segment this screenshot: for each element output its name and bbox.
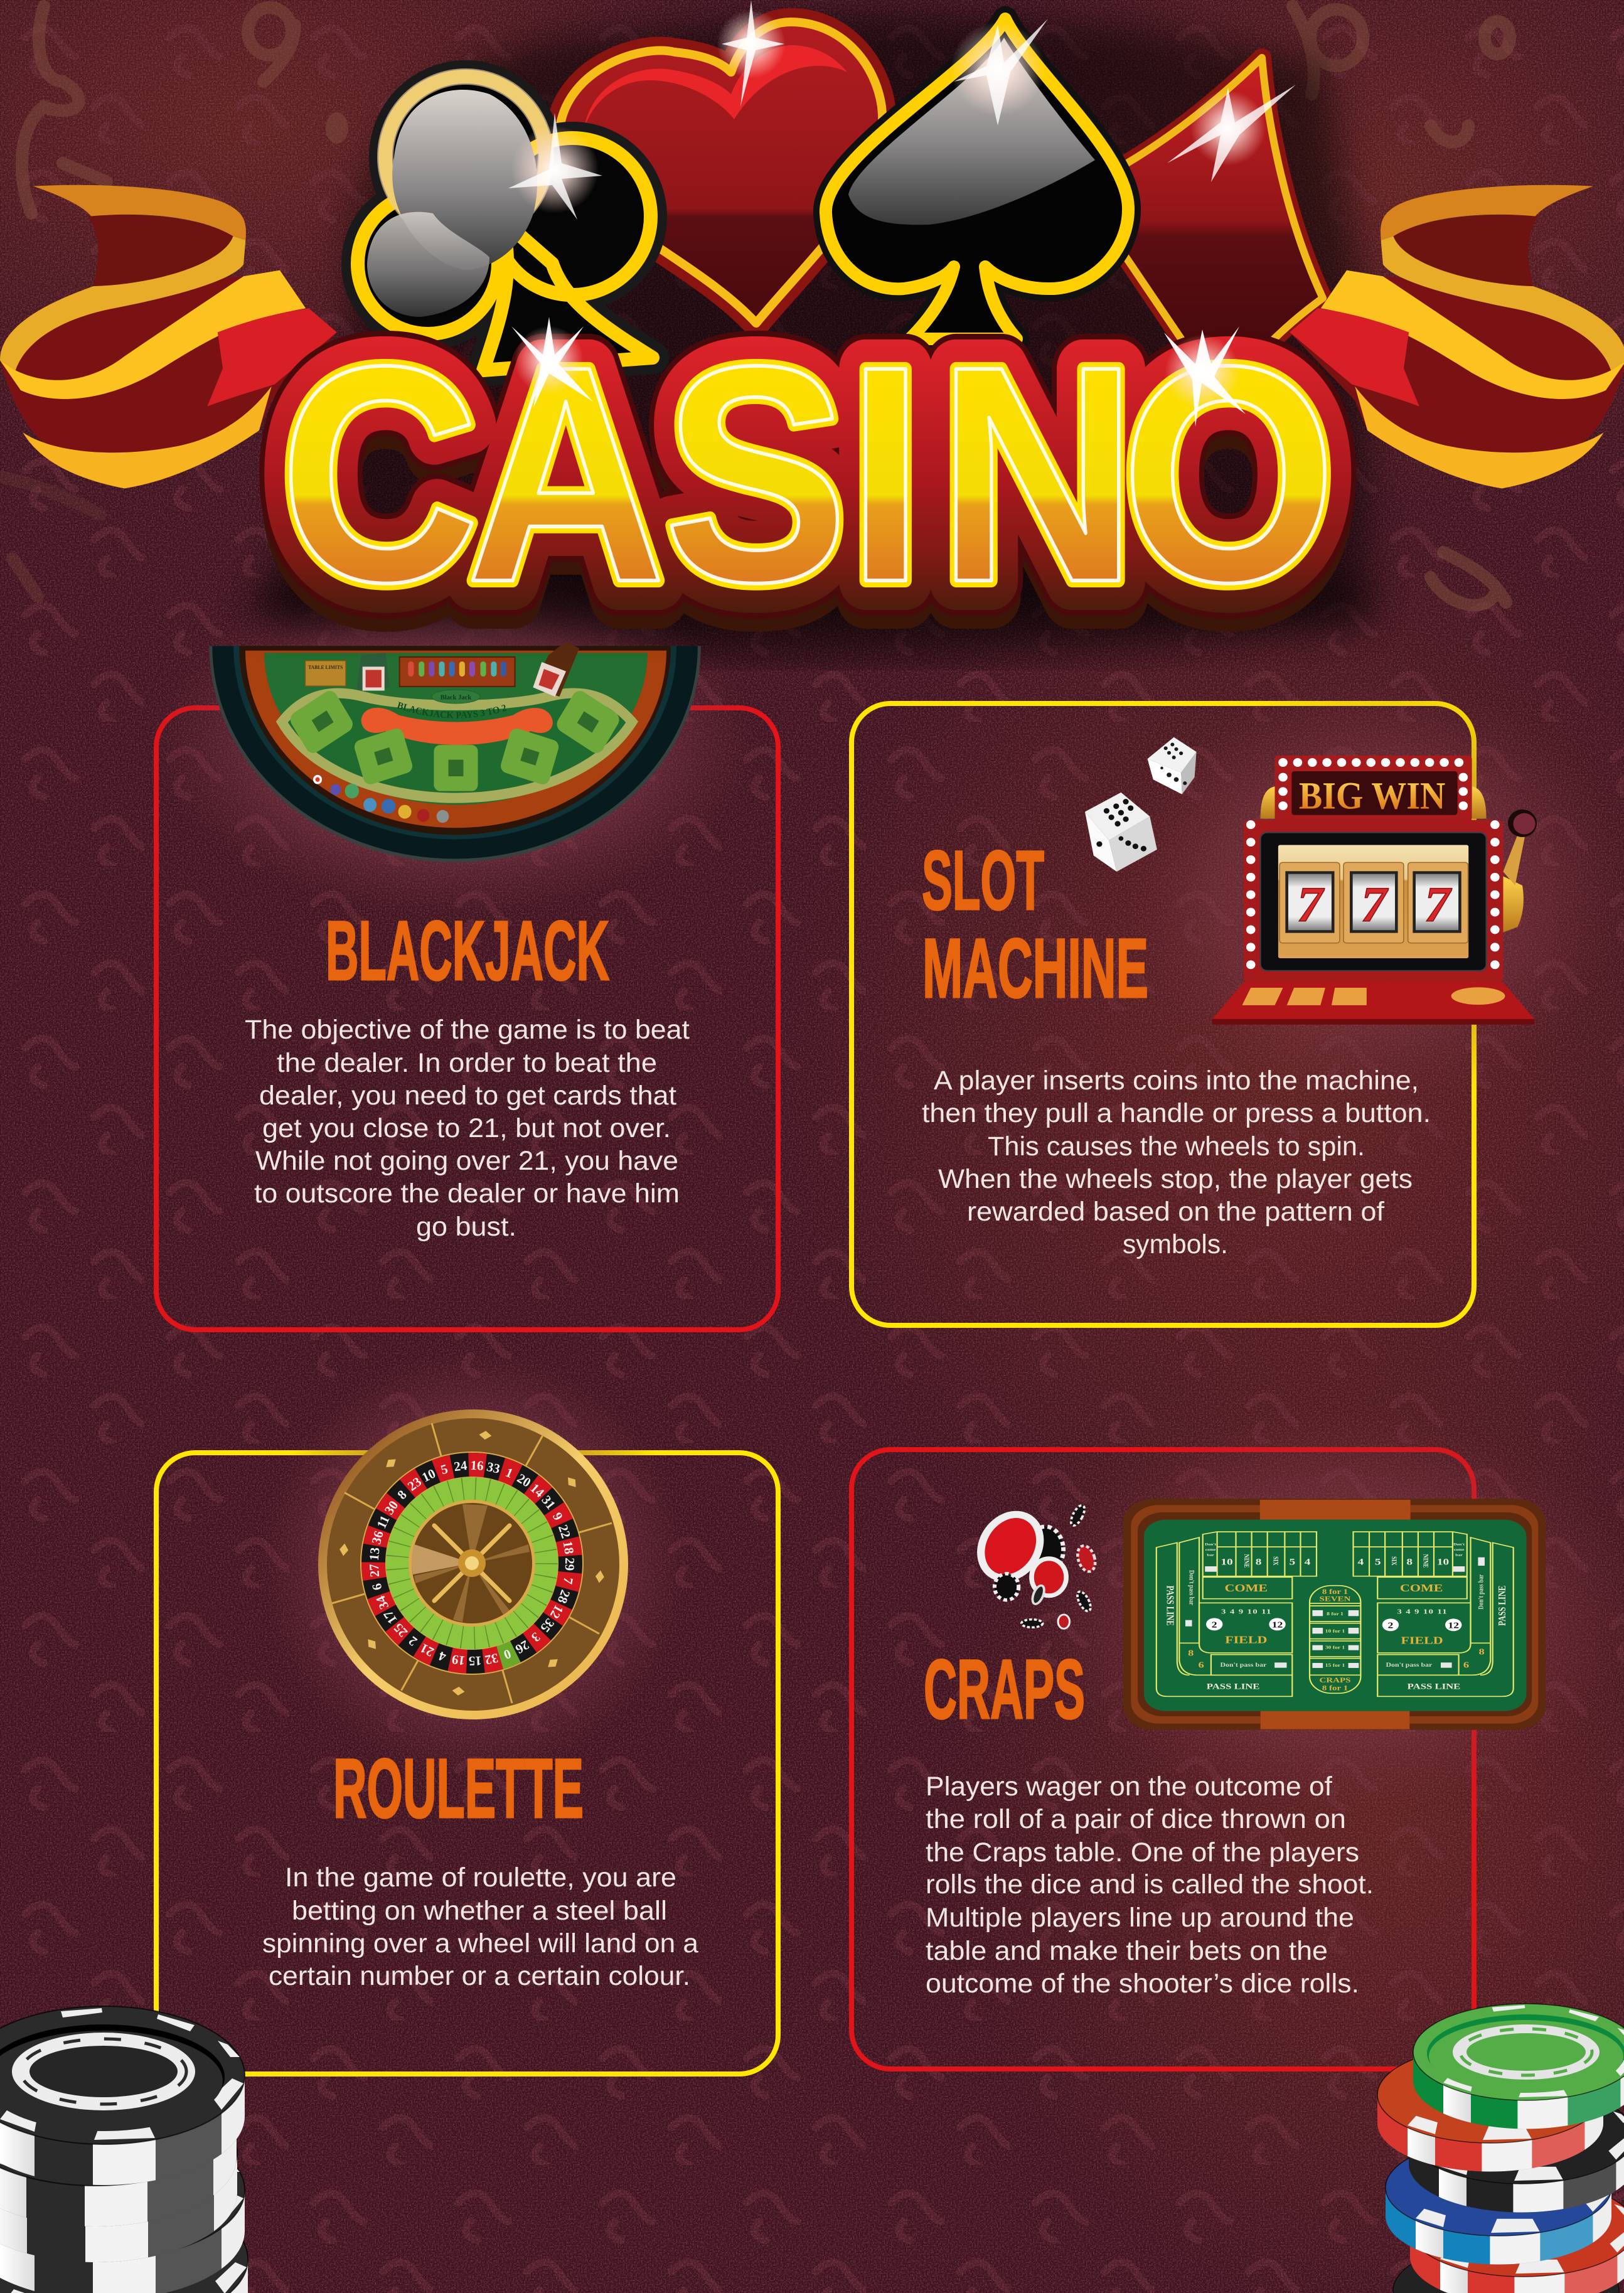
title: CASINO: CASINO — [280, 302, 1337, 646]
icon: craps table: 12 — [1272, 1620, 1283, 1630]
icon: roulette wheel: 31 — [538, 1492, 558, 1512]
icon: roulette wheel: 3 — [528, 1630, 543, 1645]
icon: roulette wheel: 33 — [485, 1459, 501, 1477]
text: slot machine description: symbols. — [1123, 1229, 1228, 1259]
text: roulette description: certain number or a certain colour. — [269, 1961, 690, 1991]
text: slot machine description: This causes the wheels to spin. — [988, 1131, 1365, 1162]
icon: roulette wheel: 10 — [419, 1466, 438, 1485]
text: blackjack description: The objective of the game is to beat — [245, 1015, 690, 1045]
icon: craps table: SIX — [1390, 1556, 1397, 1566]
heading: slot machine: MACHINE — [922, 922, 1148, 1015]
heading: craps: CRAPS — [924, 1643, 1085, 1736]
icon: roulette wheel: 26 — [513, 1637, 532, 1657]
icon: diamond suit — [1079, 58, 1323, 402]
icon: roulette wheel: 27 — [366, 1563, 382, 1578]
text: craps description: rolls the dice and is called the shoot. — [926, 1869, 1374, 1900]
icon: craps table: 8 for 1 — [1322, 1588, 1348, 1596]
icon: heart suit — [560, 22, 882, 323]
icon: craps table: 10 for 1 — [1325, 1628, 1345, 1633]
text: craps description: outcome of the shooter’s dice rolls. — [926, 1969, 1359, 1999]
icon: chips cluster — [970, 1504, 1098, 1628]
text: blackjack description — [245, 1015, 690, 1242]
icon: roulette wheel: 9 — [550, 1510, 566, 1523]
ribbon: right — [1290, 185, 1624, 488]
icon: roulette wheel: 25 — [390, 1620, 410, 1640]
icon: craps table: 8 — [1256, 1557, 1262, 1567]
text: roulette description: betting on whether a steel ball — [292, 1896, 667, 1926]
icon: roulette wheel: 16 — [470, 1458, 484, 1473]
icon: craps table: NINE — [1242, 1554, 1250, 1568]
ribbon: left — [0, 185, 337, 488]
icon: roulette wheel: 24 — [453, 1458, 468, 1474]
slot panel border — [852, 703, 1474, 1325]
icon glow: blackjack — [154, 565, 756, 916]
icon: slot machine — [1212, 756, 1537, 1025]
icon: slot machine: 7 — [1297, 877, 1325, 932]
icon: craps table: Don't — [1453, 1542, 1465, 1546]
text: blackjack description: to outscore the dealer or have him — [254, 1179, 680, 1209]
icon: slot machine: 7 — [1361, 877, 1389, 932]
heading: roulette: ROULETTE — [333, 1742, 584, 1836]
icon: craps table: 2 — [1388, 1621, 1394, 1630]
panel: slot machine — [852, 678, 1624, 1325]
icon: roulette wheel: 28 — [555, 1588, 573, 1605]
icon: craps table: 2 — [1212, 1620, 1217, 1630]
text: blackjack description: go bust. — [416, 1212, 516, 1242]
icon: craps table: PASS LINE — [1164, 1586, 1175, 1626]
panel: blackjack — [154, 596, 781, 1332]
icon glow: craps table — [1035, 1412, 1624, 1814]
icon: blackjack table: TABLE LIMITS — [308, 665, 343, 670]
chip stack: black — [0, 2006, 248, 2293]
heading: blackjack: BLACKJACK — [326, 904, 609, 998]
text: craps description — [926, 1772, 1374, 1999]
icon: blackjack table — [209, 641, 701, 862]
icon: craps table: 12 — [1448, 1621, 1459, 1630]
icon: roulette wheel: 14 — [527, 1480, 547, 1500]
text: roulette description: spinning over a wheel will land on a — [262, 1928, 698, 1959]
title: CASINO: CASINO — [280, 302, 1337, 646]
icon: roulette wheel: 12 — [547, 1602, 567, 1622]
icon: roulette wheel: 4 — [437, 1649, 447, 1665]
text: blackjack description: While not going over 21, you have — [255, 1146, 678, 1176]
icon: spade suit — [826, 19, 1128, 339]
icon: roulette wheel: 36 — [368, 1529, 387, 1546]
icon: roulette wheel: 11 — [373, 1513, 393, 1531]
icon: roulette wheel — [318, 1409, 628, 1719]
icon: craps table: 10 — [1221, 1557, 1233, 1567]
text: craps description: the roll of a pair of dice thrown on — [926, 1804, 1346, 1834]
icon: craps table: 8 for 1 — [1322, 1684, 1348, 1692]
icon: roulette wheel: 2 — [405, 1633, 420, 1649]
icon: blackjack table: BLACKJACK PAYS 3 TO 2 — [397, 702, 507, 718]
text: blackjack description: the dealer. In order to beat the — [277, 1048, 657, 1078]
icon: craps table: 3 4 9 10 11 — [1221, 1608, 1271, 1615]
icon: roulette wheel: 19 — [451, 1652, 466, 1669]
icon: slot machine: 7 — [1424, 877, 1453, 932]
icon glow: roulette — [260, 1351, 686, 1778]
icon: blackjack table: Black Jack — [441, 693, 471, 702]
icon: craps table: bar — [1455, 1553, 1463, 1557]
text: roulette description — [262, 1863, 698, 1991]
sparkles — [508, 0, 1296, 427]
icon: craps table: SEVEN — [1320, 1595, 1351, 1603]
heading: slot machine — [922, 834, 1148, 1015]
icon: roulette wheel: 21 — [418, 1640, 436, 1660]
icon: craps table: COME — [1225, 1583, 1268, 1594]
icon: roulette wheel: 15 — [468, 1654, 482, 1669]
icon: craps table: 6 — [1463, 1659, 1469, 1670]
icon: roulette wheel: 13 — [366, 1547, 383, 1561]
icon: roulette wheel: 29 — [562, 1558, 577, 1571]
icon: craps table: 4 — [1305, 1557, 1311, 1567]
icon: roulette wheel: 32 — [484, 1650, 499, 1668]
icon: roulette wheel: 1 — [503, 1465, 515, 1481]
text: craps description: Players wager on the outcome of — [926, 1772, 1333, 1802]
icon: craps table: Don't pass bar — [1386, 1662, 1433, 1669]
roulette panel border — [156, 1453, 778, 2074]
icon glow: slot machine — [1123, 678, 1624, 1104]
title: CASINO: CASINO — [280, 302, 1337, 646]
icon: craps table: PASS LINE — [1408, 1682, 1460, 1691]
chip stack: coloured — [1377, 2004, 1624, 2293]
icon: craps table: Don't pass bar — [1477, 1574, 1485, 1610]
text: blackjack description: get you close to 21, but not over. — [262, 1113, 671, 1143]
text: slot machine description — [922, 1066, 1431, 1259]
panel: craps — [852, 1412, 1624, 2069]
icon: roulette wheel: 7 — [560, 1576, 576, 1585]
text: roulette description: In the game of roulette, you are — [285, 1863, 676, 1893]
icon: craps table: Don't — [1205, 1542, 1217, 1546]
icon: craps table: 8 for 1 — [1327, 1611, 1344, 1617]
icon: craps table: FIELD — [1225, 1635, 1267, 1646]
text: slot machine description: A player inserts coins into the machine, — [934, 1066, 1419, 1096]
icon: craps table: Don't pass bar — [1221, 1662, 1267, 1669]
icon: craps table: come — [1205, 1548, 1215, 1552]
panel: roulette — [156, 1351, 778, 2074]
icon: roulette wheel: 22 — [555, 1523, 574, 1540]
icon: craps table: 4 — [1358, 1557, 1364, 1567]
text: blackjack description: dealer, you need to get cards that — [259, 1081, 676, 1111]
icon: dice — [1085, 737, 1197, 872]
icon: craps table: SIX — [1271, 1556, 1279, 1566]
title: CASINO: CASINO — [280, 302, 1337, 646]
icon: craps table: 8 — [1188, 1647, 1194, 1658]
icon: craps table: FIELD — [1401, 1635, 1443, 1647]
craps panel border — [852, 1450, 1474, 2069]
icon: roulette wheel: 0 — [501, 1646, 513, 1662]
text: slot machine description: When the wheels stop, the player gets — [938, 1164, 1413, 1194]
logo shadow — [264, 13, 1368, 621]
icon: craps table: come — [1454, 1548, 1464, 1552]
icon: roulette wheel: 30 — [382, 1498, 401, 1517]
icon: craps table: 8 — [1406, 1557, 1413, 1567]
text: craps description: table and make their bets on the — [926, 1936, 1328, 1966]
icon: roulette wheel: 35 — [537, 1615, 557, 1635]
icon: craps table: Don't pass bar — [1187, 1570, 1195, 1605]
icon: craps table: 8 — [1479, 1647, 1485, 1657]
icon: roulette wheel: 8 — [394, 1487, 410, 1502]
icon: craps table: PASS LINE — [1497, 1585, 1508, 1626]
icon: roulette wheel: 20 — [515, 1470, 533, 1490]
icon: craps table: 15 for 1 — [1325, 1662, 1345, 1668]
icon: craps table: 3 4 9 10 11 — [1397, 1608, 1447, 1615]
heading: slot machine: SLOT — [922, 834, 1044, 927]
text: craps description: the Craps table. One of the players — [926, 1837, 1359, 1868]
icon: slot machine: BIG WIN — [1299, 774, 1445, 817]
icon: roulette wheel: 5 — [439, 1461, 449, 1477]
logo: casino with suits and ribbons — [0, 0, 1624, 661]
icon: craps table: 6 — [1198, 1659, 1204, 1670]
icon: roulette wheel: 34 — [373, 1593, 392, 1612]
icon: roulette wheel: 17 — [380, 1608, 400, 1627]
icon: roulette wheel: 23 — [405, 1474, 424, 1494]
icon: craps table: 5 — [1375, 1557, 1381, 1567]
icon: craps table — [1123, 1499, 1546, 1730]
icon: craps table: PASS LINE — [1207, 1682, 1260, 1691]
icon: club suit — [358, 77, 653, 370]
icon: craps table: COME — [1400, 1583, 1443, 1594]
icon: craps table: CRAPS — [1320, 1676, 1350, 1684]
icon: craps table: 5 — [1289, 1557, 1295, 1567]
text: slot machine description: rewarded based on the pattern of — [967, 1197, 1385, 1227]
icon: roulette wheel: 6 — [369, 1582, 385, 1592]
title: CASINO: CASINO — [280, 318, 1337, 661]
icon: craps table: 10 — [1437, 1557, 1449, 1567]
icon: craps table: 30 for 1 — [1325, 1645, 1345, 1650]
icon: craps table: bar — [1207, 1553, 1214, 1557]
icon: roulette wheel: 18 — [560, 1540, 577, 1555]
icon: craps table: NINE — [1421, 1554, 1429, 1568]
blackjack panel border — [156, 708, 778, 1330]
text: craps description: Multiple players line up around the — [926, 1903, 1354, 1933]
text: slot machine description: then they pull a handle or press a button. — [922, 1098, 1431, 1128]
